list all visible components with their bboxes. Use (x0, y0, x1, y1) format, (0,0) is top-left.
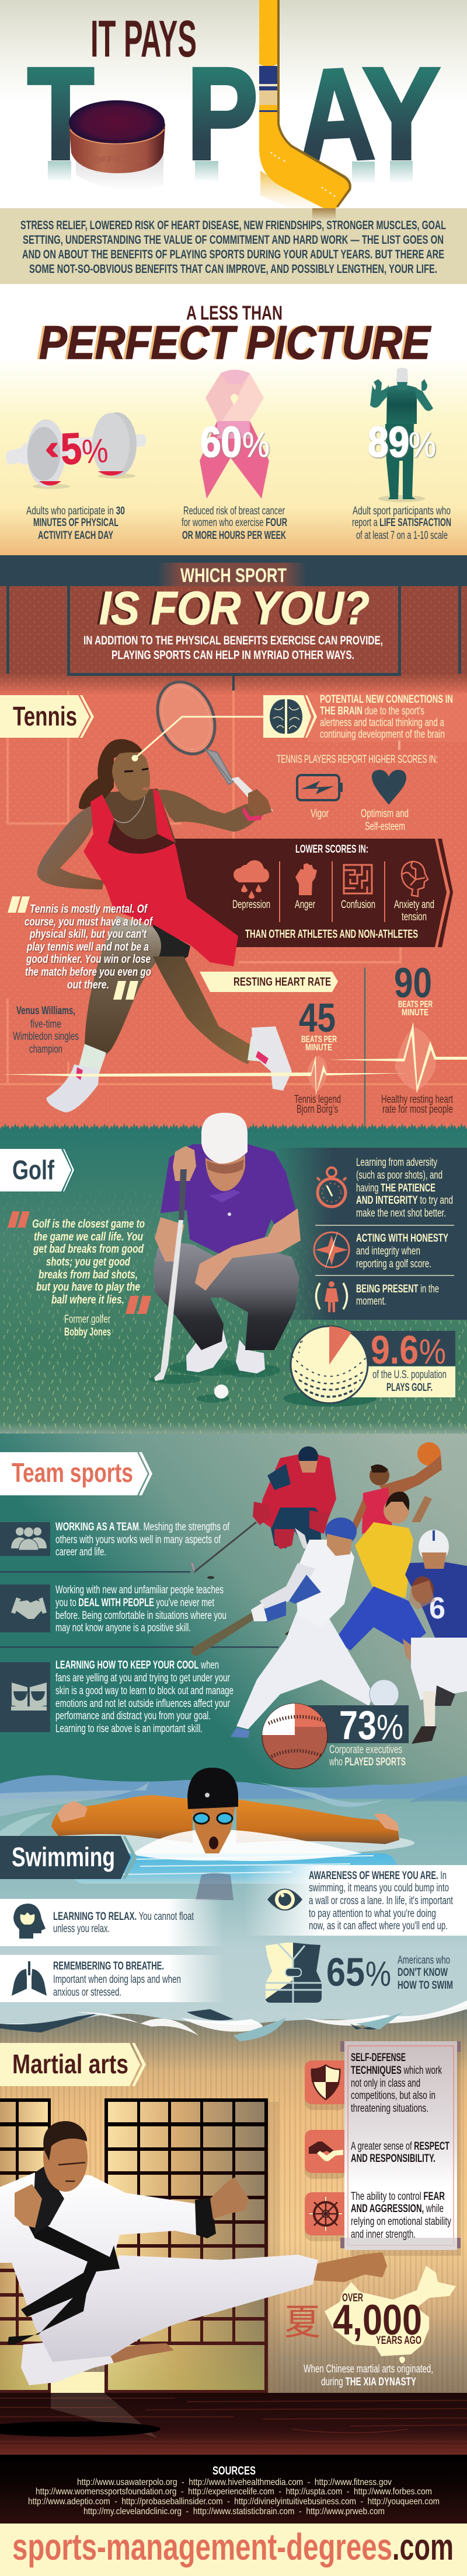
quote: bobby jones: get bad breaks from good (33, 1243, 144, 1256)
quote: bobby jones: Former golfer (64, 1313, 110, 1326)
panel: golf benefits: AND INTEGRITY to try and (356, 1194, 453, 1207)
chart: resting heart rate: MINUTE (305, 1043, 332, 1053)
icon: heart (372, 770, 406, 805)
panel: golf benefits: moment. (356, 1295, 386, 1308)
label: martial arts: Martial arts (12, 2049, 128, 2079)
callout: remembering to breathe: Important when doing laps and when (53, 1974, 181, 1986)
icon: stopwatch (317, 1168, 346, 1207)
label: swimming (0, 1836, 137, 1879)
quote: bobby jones: breaks from bad shots, (39, 1268, 138, 1281)
stat: under 5 percent (44, 422, 109, 475)
panel: lower scores: Anger (295, 899, 315, 911)
stat: over 4000 years ago: during THE XIA DYNASTY (321, 2376, 416, 2388)
icon: hockey puck: OFFICIAL (92, 153, 143, 165)
icon: book and sunglasses (11, 1683, 47, 1711)
chart: resting heart rate: 45 (299, 995, 336, 1040)
text: keep your cool: emotions and not let outside influences affect your (55, 1698, 230, 1710)
illustration: scroll of benefits: A greater sense of RESPECT (351, 2140, 449, 2153)
panel: golf background (0, 1129, 467, 1435)
text: higher scores: Self-esteem (365, 821, 405, 833)
quote: bobby jones (8, 1211, 151, 1338)
text: keep your cool (0, 1659, 234, 1735)
callout: learning to relax: unless you relax. (53, 1923, 110, 1935)
illustration: scroll of benefits: threatening situations. (351, 2102, 428, 2115)
title: to play: Y (363, 41, 440, 187)
quote: bobby jones: Bobby Jones (64, 1326, 111, 1338)
label: tennis (0, 695, 94, 738)
panel: martial arts background (0, 2000, 467, 2393)
illustration: scroll of benefits: not only in class and (351, 2077, 420, 2090)
panel: lower scores (163, 839, 453, 947)
text: keep your cool: LEARNING HOW TO KEEP YOUR COOL when (55, 1659, 219, 1671)
icon: rain cloud (234, 860, 269, 899)
quote: venus williams: course, you must have a lot of (25, 916, 154, 928)
caption: breast cancer: OR MORE HOURS PER WEEK (182, 530, 286, 542)
panel: perfect picture background (0, 284, 467, 555)
quote: venus williams: Wimbledon singles (13, 1031, 79, 1043)
panel: team sports background (0, 1434, 467, 1790)
label: golf: Golf (12, 1155, 55, 1185)
heading: is for you: IS FOR YOU? (99, 582, 370, 634)
quote: venus williams (8, 896, 154, 1056)
stat: 60 percent (200, 419, 270, 466)
caption: breast cancer: for women who exercise FOUR (182, 517, 287, 529)
quote: venus williams: good thinker. You win or lose (26, 953, 151, 966)
caption: physical activity (26, 505, 125, 542)
icon: puzzle head (402, 861, 428, 896)
title: to play (27, 40, 440, 190)
chart: resting heart rate: Bjorn Borg's (297, 1103, 338, 1116)
quote: venus williams: the match before you even go (25, 966, 151, 979)
panel: golf benefits: reporting a golf score. (356, 1258, 431, 1270)
quote: venus williams: out there. (67, 979, 109, 991)
illustration: scroll of benefits: competitions, but also in (351, 2090, 435, 2102)
panel: header background (0, 0, 467, 102)
quote: venus williams: Tennis is mostly mental. Of (30, 903, 148, 916)
illustration: shoji window (0, 2098, 279, 2393)
stat: 73 percent executives (262, 1702, 409, 1769)
panel: sources (0, 2455, 467, 2524)
athlete: hockey player (190, 889, 467, 1579)
caption: physical activity: MINUTES OF PHYSICAL (33, 517, 119, 529)
panel: intro band (0, 208, 467, 284)
athlete: soccer player (285, 1492, 432, 1674)
heading: it pays: IT PAYS (90, 9, 197, 68)
panel: lower scores: Confusion (341, 899, 375, 911)
chart: resting heart rate (0, 960, 467, 1128)
stat: 65 percent cannot swim: % (365, 1954, 391, 1993)
quote: bobby jones: Golf is the closest game to (32, 1218, 145, 1231)
illustration: team athletes (0, 889, 467, 1744)
quote: bobby jones: but you have to play the (36, 1281, 140, 1294)
panel: which sport header band (0, 555, 467, 590)
illustration: swimmer (29, 1768, 414, 1900)
stat: 89 percent (368, 419, 436, 466)
label: martial arts (0, 2043, 146, 2086)
caption: physical activity: Adults who participate in 30 (26, 505, 125, 517)
caption: breast cancer (182, 505, 287, 542)
quote: bobby jones: the game we call life. You (34, 1231, 143, 1243)
stat: 9.6 percent plays golf: 9.6 (371, 1327, 419, 1372)
callout: brain connections: THE BRAIN due to the sport's (320, 705, 424, 717)
athlete: baseball batter (191, 1517, 374, 1738)
stat: over 4000 years ago: OVER (342, 2292, 363, 2304)
text: deal with people: before. Being comfortable in situations where you (55, 1610, 226, 1622)
text: higher scores: Vigor (311, 808, 329, 820)
panel: lower scores: Depression (232, 899, 270, 911)
stat: under 5 percent: % (81, 432, 109, 471)
stat: 65 percent cannot swim (266, 1943, 453, 2003)
chart: resting heart rate: 90 (394, 960, 432, 1007)
callout: remembering to breathe: anxious or stressed. (53, 1986, 121, 1999)
panel: golf benefits: BEING PRESENT in the (356, 1283, 439, 1295)
icon: victorious man (370, 367, 433, 502)
panel: lower scores: Anxiety and (394, 899, 434, 911)
text: keep your cool: performance and distract you from your goal. (55, 1710, 211, 1722)
stat: 89 percent: % (409, 425, 436, 464)
heading: a less than: A LESS THAN (186, 302, 283, 324)
stat: 73 percent executives: 73 (339, 1702, 377, 1748)
text: higher scores (277, 753, 438, 833)
stat: over 4000 years ago: 4,000 (333, 2297, 422, 2344)
text: keep your cool: Learning to rise above is an important skill. (55, 1723, 203, 1735)
text: working as a team: career and life. (55, 1546, 106, 1558)
label: swimming: Swimming (12, 1842, 115, 1872)
stat: 65 percent cannot swim: 65 (326, 1950, 365, 1995)
icon: eye (267, 1888, 302, 1911)
quote: venus williams: physical skill, but you can't (29, 928, 147, 941)
stat: under 5 percent: 5 (60, 424, 83, 474)
text: deal with people: you to DEAL WITH PEOPLE you've never met (55, 1597, 214, 1609)
chart: resting heart rate: MINUTE (402, 1008, 428, 1018)
icon tab: shield (305, 2060, 347, 2110)
caption: life satisfaction (352, 505, 451, 542)
icon: maze (344, 865, 372, 893)
illustration: scroll of benefits (305, 2041, 461, 2256)
quote: venus williams: play tennis well and not be a (26, 941, 149, 954)
icon: fist (295, 863, 317, 895)
icon: brain (270, 699, 302, 734)
illustration: scroll of benefits: SELF-DEFENSE (351, 2052, 406, 2064)
panel: lower scores: LOWER SCORES IN: (295, 843, 368, 856)
icon: dumbbell (6, 412, 146, 489)
panel: sources: SOURCES (212, 2465, 256, 2477)
illustration: scroll of benefits: The ability to control FEAR (351, 2191, 445, 2203)
label: team sports (0, 1452, 152, 1495)
stat: 73 percent executives: % (377, 1708, 403, 1747)
illustration: tennis player (37, 717, 292, 1112)
icon: lungs (12, 1961, 47, 1996)
stat: 73 percent executives: Corporate executives (329, 1744, 402, 1756)
stat: 73 percent executives: who PLAYED SPORTS (329, 1756, 406, 1768)
callout: learning to relax: LEARNING TO RELAX. You cannot float (53, 1911, 194, 1923)
quote: bobby jones: ball where it lies. (51, 1294, 124, 1306)
panel: wooden floor (0, 2393, 467, 2455)
text: deal with people: Working with new and unfamiliar people teaches (55, 1584, 224, 1596)
illustration: scroll of benefits: AND AGGRESSION, while (351, 2203, 444, 2215)
chart: resting heart rate: BEATS PER (398, 1000, 433, 1010)
text: which sport intro (83, 634, 383, 662)
text: deal with people: may not know anyone is a positive skill. (55, 1622, 191, 1634)
quote: venus williams: Venus Williams, (16, 1005, 75, 1017)
panel: swimming background (0, 1775, 467, 2024)
panel: lower scores: tension (402, 911, 427, 923)
panel: tennis court background (0, 586, 467, 1130)
text: working as a team: WORKING AS A TEAM. Meshing the strengths of (55, 1521, 230, 1533)
icon: people (11, 1527, 47, 1550)
illustration: scroll of benefits: TECHNIQUES which work (351, 2065, 442, 2077)
text: keep your cool: fans are yelling at you and trying to get under your (55, 1672, 230, 1684)
caption: physical activity: ACTIVITY EACH DAY (38, 530, 113, 542)
callout: brain connections (263, 693, 467, 742)
icon: battery (297, 775, 343, 800)
stat: 60 percent: % (242, 425, 270, 464)
heading: which sport: WHICH SPORT (180, 565, 287, 587)
caption: breast cancer: Reduced risk of breast cancer (183, 505, 285, 517)
icon: pink ribbon (200, 370, 269, 499)
text: keep your cool: skin is a good way to learn to block out and manage (55, 1685, 234, 1697)
icon tab: ship wheel (305, 2192, 347, 2241)
quote: venus williams: five-time (30, 1018, 61, 1031)
text: which sport intro: PLAYING SPORTS CAN HELP IN MYRIAD OTHER WAYS. (111, 649, 354, 662)
stat: under 5 percent: ‹ (44, 429, 60, 467)
panel: sources: http://my.clevelandclinic.org - http://www.statisticbrain.com - http://www.prweb.com (83, 2507, 385, 2517)
stat: 60 percent: 60 (200, 419, 242, 466)
quote: bobby jones: shots; you get good (46, 1256, 131, 1268)
callout: remembering to breathe (0, 1955, 224, 2002)
text: working as a team: others with yours works well in many aspects of (55, 1534, 221, 1546)
label: tennis: Tennis (13, 701, 77, 731)
athlete: basketball player (350, 1442, 442, 1534)
quote: venus williams: champion (29, 1043, 62, 1056)
chart: resting heart rate: BEATS PER (301, 1035, 337, 1045)
stat: over 4000 years ago (284, 2266, 456, 2388)
callout: awareness (244, 1865, 467, 1936)
text: working as a team (0, 1521, 230, 1558)
panel: golf benefits (274, 1148, 467, 1320)
stat: 9.6 percent plays golf: % (419, 1332, 446, 1371)
icon: head with lotus (13, 1904, 46, 1939)
icon: hockey stick (259, 0, 351, 219)
stat: 9.6 percent plays golf (283, 1326, 455, 1407)
panel: sources: http://www.usawaterpolo.org - http://www.hivehealthmedia.com - http://www.fitness.gov (77, 2477, 392, 2487)
icon: present person (316, 1281, 347, 1312)
chart: resting heart rate: RESTING HEART RATE (234, 976, 331, 989)
title: to play: A (294, 40, 377, 190)
icon: life jacket (266, 1943, 322, 2003)
panel: golf benefits: having THE PATIENCE (356, 1182, 435, 1194)
title: to play: T (27, 41, 94, 187)
panel: golf benefits: and integrity when (356, 1245, 420, 1257)
illustration: scroll of benefits: and inner strength. (351, 2228, 416, 2241)
stat: 89 percent: 89 (368, 419, 409, 466)
icon: china map (325, 2266, 456, 2363)
label: golf (0, 1149, 76, 1191)
label: team sports: Team sports (12, 1457, 133, 1488)
icon: handshake (11, 1597, 47, 1619)
illustration: martial artist kicking (0, 2121, 387, 2385)
icon tab: respect hands (305, 2130, 347, 2179)
chart: resting heart rate: Tennis legend (294, 1094, 341, 1106)
illustration: tennis racket (147, 673, 273, 815)
text: higher scores: Optimism and (361, 808, 409, 820)
stat: 9.6 percent plays golf: PLAYS GOLF. (386, 1382, 433, 1394)
stat: over 4000 years ago: YEARS AGO (376, 2335, 421, 2347)
text: deal with people (0, 1584, 226, 1634)
illustration: golfer (149, 1113, 301, 1403)
callout: learning to relax (0, 1899, 224, 1946)
title: to play: P (187, 41, 258, 187)
athlete: football quarterback (405, 1530, 467, 1744)
callout: remembering to breathe: REMEMBERING TO BREATHE. (53, 1960, 164, 1972)
athlete: football quarterback: 6 (429, 1592, 445, 1625)
icon: soccer ball (370, 1680, 399, 1709)
icon: hockey puck (69, 100, 165, 191)
stat: over 4000 years ago: 夏 (284, 2302, 320, 2343)
icon: compass (314, 1229, 349, 1270)
